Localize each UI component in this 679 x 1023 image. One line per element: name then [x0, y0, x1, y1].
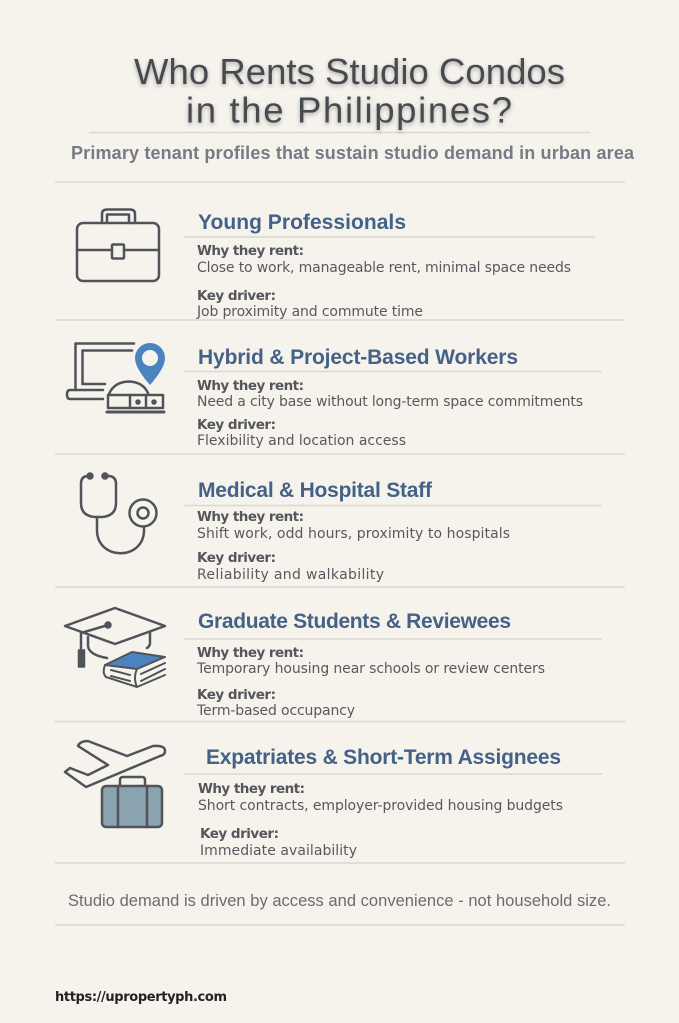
section: Hybrid & Project-Based Workers: Need a city base without long-term space commitments: [197, 394, 583, 410]
subtitle: Primary tenant profiles that sustain studio demand in urban area: [71, 143, 635, 163]
section: Hybrid & Project-Based Workers: Why they rent:: [197, 378, 304, 394]
section: Young Professionals: Young Professionals: [198, 211, 406, 234]
section: Hybrid & Project-Based Workers: Key driver:: [197, 417, 276, 433]
section: Hybrid & Project-Based Workers: Hybrid & Project-Based Workers: [198, 346, 518, 369]
section: Graduate Students & Reviewees: Why they rent:: [197, 645, 304, 661]
section: Hybrid & Project-Based Workers: [197, 346, 583, 449]
section: Expatriates & Short-Term Assignees: Expatriates & Short-Term Assignees: [206, 746, 561, 769]
section: Young Professionals: Job proximity and commute time: [196, 304, 423, 320]
title: [134, 51, 565, 130]
icon: laptop with location pin: [67, 343, 165, 412]
icon: stethoscope: [81, 474, 156, 553]
section: Young Professionals: Close to work, manageable rent, minimal space needs: [197, 260, 571, 276]
section: Expatriates & Short-Term Assignees: Short contracts, employer-provided housing budgets: [198, 798, 563, 814]
icon: briefcase: [77, 210, 159, 281]
section: Medical & Hospital Staff: Why they rent:: [197, 509, 304, 525]
title: Who Rents Studio Condos: [134, 51, 565, 92]
title: in the Philippines?: [186, 90, 512, 130]
section: Expatriates & Short-Term Assignees: Immediate availability: [200, 843, 357, 859]
section: Medical & Hospital Staff: Key driver:: [197, 550, 276, 566]
section: Graduate Students & Reviewees: [196, 610, 545, 719]
section: Graduate Students & Reviewees: Key driver:: [197, 687, 276, 703]
section: Young Professionals: Key driver:: [197, 288, 276, 304]
section: Young Professionals: Why they rent:: [197, 243, 304, 259]
website url: https://upropertyph.com: [55, 990, 227, 1005]
icon: graduation cap and book: [65, 608, 165, 687]
section: Graduate Students & Reviewees: Temporary housing near schools or review centers: [196, 661, 545, 677]
closing statement: Studio demand is driven by access and convenience - not household size.: [68, 892, 611, 910]
section: Graduate Students & Reviewees: Graduate Students & Reviewees: [198, 610, 511, 633]
section: Medical & Hospital Staff: [197, 479, 510, 583]
section: Medical & Hospital Staff: Medical & Hospital Staff: [198, 479, 433, 502]
section: Medical & Hospital Staff: Shift work, odd hours, proximity to hospitals: [197, 526, 510, 542]
icon: airplane and suitcase: [65, 741, 165, 827]
section: Medical & Hospital Staff: Reliability and walkability: [197, 567, 384, 583]
section: Hybrid & Project-Based Workers: Flexibility and location access: [197, 433, 406, 449]
section: Expatriates & Short-Term Assignees: [198, 746, 563, 859]
section: Young Professionals: [196, 211, 571, 320]
section: Expatriates & Short-Term Assignees: Key driver:: [200, 826, 279, 842]
section: Expatriates & Short-Term Assignees: Why they rent:: [198, 781, 305, 797]
section: Graduate Students & Reviewees: Term-based occupancy: [196, 703, 355, 719]
